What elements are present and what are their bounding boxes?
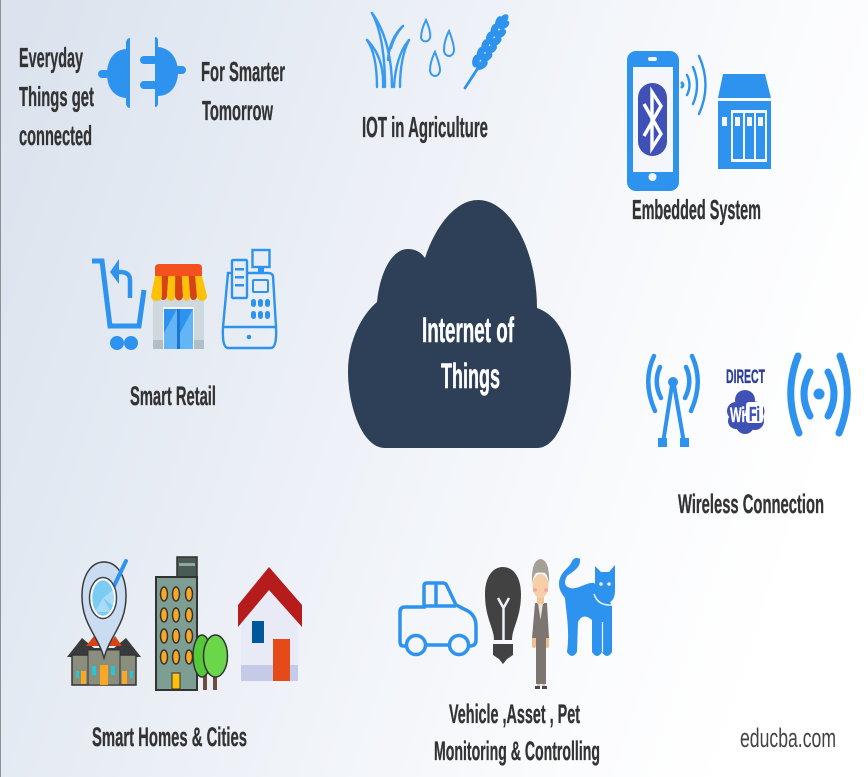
icon: wifi direct [726,367,765,434]
icon: person [532,559,549,689]
icon: pickup truck [400,583,476,654]
icon: water drops [421,20,454,76]
icon: cat [559,558,615,656]
text: everyday things get connected: Everyday [19,42,83,73]
panel: everyday things [19,37,285,151]
icon: wifi direct: Wi [730,404,745,427]
panel: vehicle asset pet [400,558,615,766]
panel: embedded system [627,51,771,225]
text: internet of things: Internet of [422,311,514,350]
text: everyday things get connected: connected [19,120,92,151]
icon: store [151,264,207,349]
icon: wifi direct: Fi [749,404,760,426]
text: smart retail: Smart Retail [130,381,216,411]
icon: light bulb [485,567,521,664]
text: internet of things [422,311,514,396]
icon: cash register [222,250,277,348]
text: for smarter tomorrow: For Smarter [201,56,285,87]
text: internet of things: Things [441,357,500,396]
text: smart homes and cities: Smart Homes & Cities [92,722,247,752]
icon: location pin over houses [67,561,141,685]
text: for smarter tomorrow [201,56,285,126]
icon: office building with trees [156,557,228,690]
text: for smarter tomorrow: Tomorrow [202,95,273,126]
text: vehicle asset pet monitoring and controlling: Vehicle ,Asset , Pet [449,699,580,729]
panel: agriculture [362,13,511,144]
icon: wifi direct: DIRECT [726,367,765,388]
shape: cloud [348,200,571,448]
icon: grass [367,13,409,87]
text: vehicle asset pet monitoring and controlling [434,699,600,766]
panel: smart retail [92,250,277,411]
icon: plug [98,37,186,108]
text: everyday things get connected: Things get [19,81,94,112]
panel: wireless connection [648,356,847,519]
icon: wireless signal [682,56,706,114]
panel: smart homes and cities [67,557,302,752]
icon: broadcast signal [791,356,847,433]
central cloud [348,200,571,448]
icon: server [718,74,771,169]
icon: wheat [465,13,511,88]
text: iot in agriculture: IOT in Agriculture [362,112,488,144]
text: everyday things get connected [19,42,94,151]
icon: house [238,567,302,681]
icon: antenna tower [648,356,698,447]
icon: shopping cart with return arrow [92,259,144,350]
icon: phone with bluetooth [627,51,679,191]
text: vehicle asset pet monitoring and controlling: Monitoring & Controlling [434,736,600,766]
